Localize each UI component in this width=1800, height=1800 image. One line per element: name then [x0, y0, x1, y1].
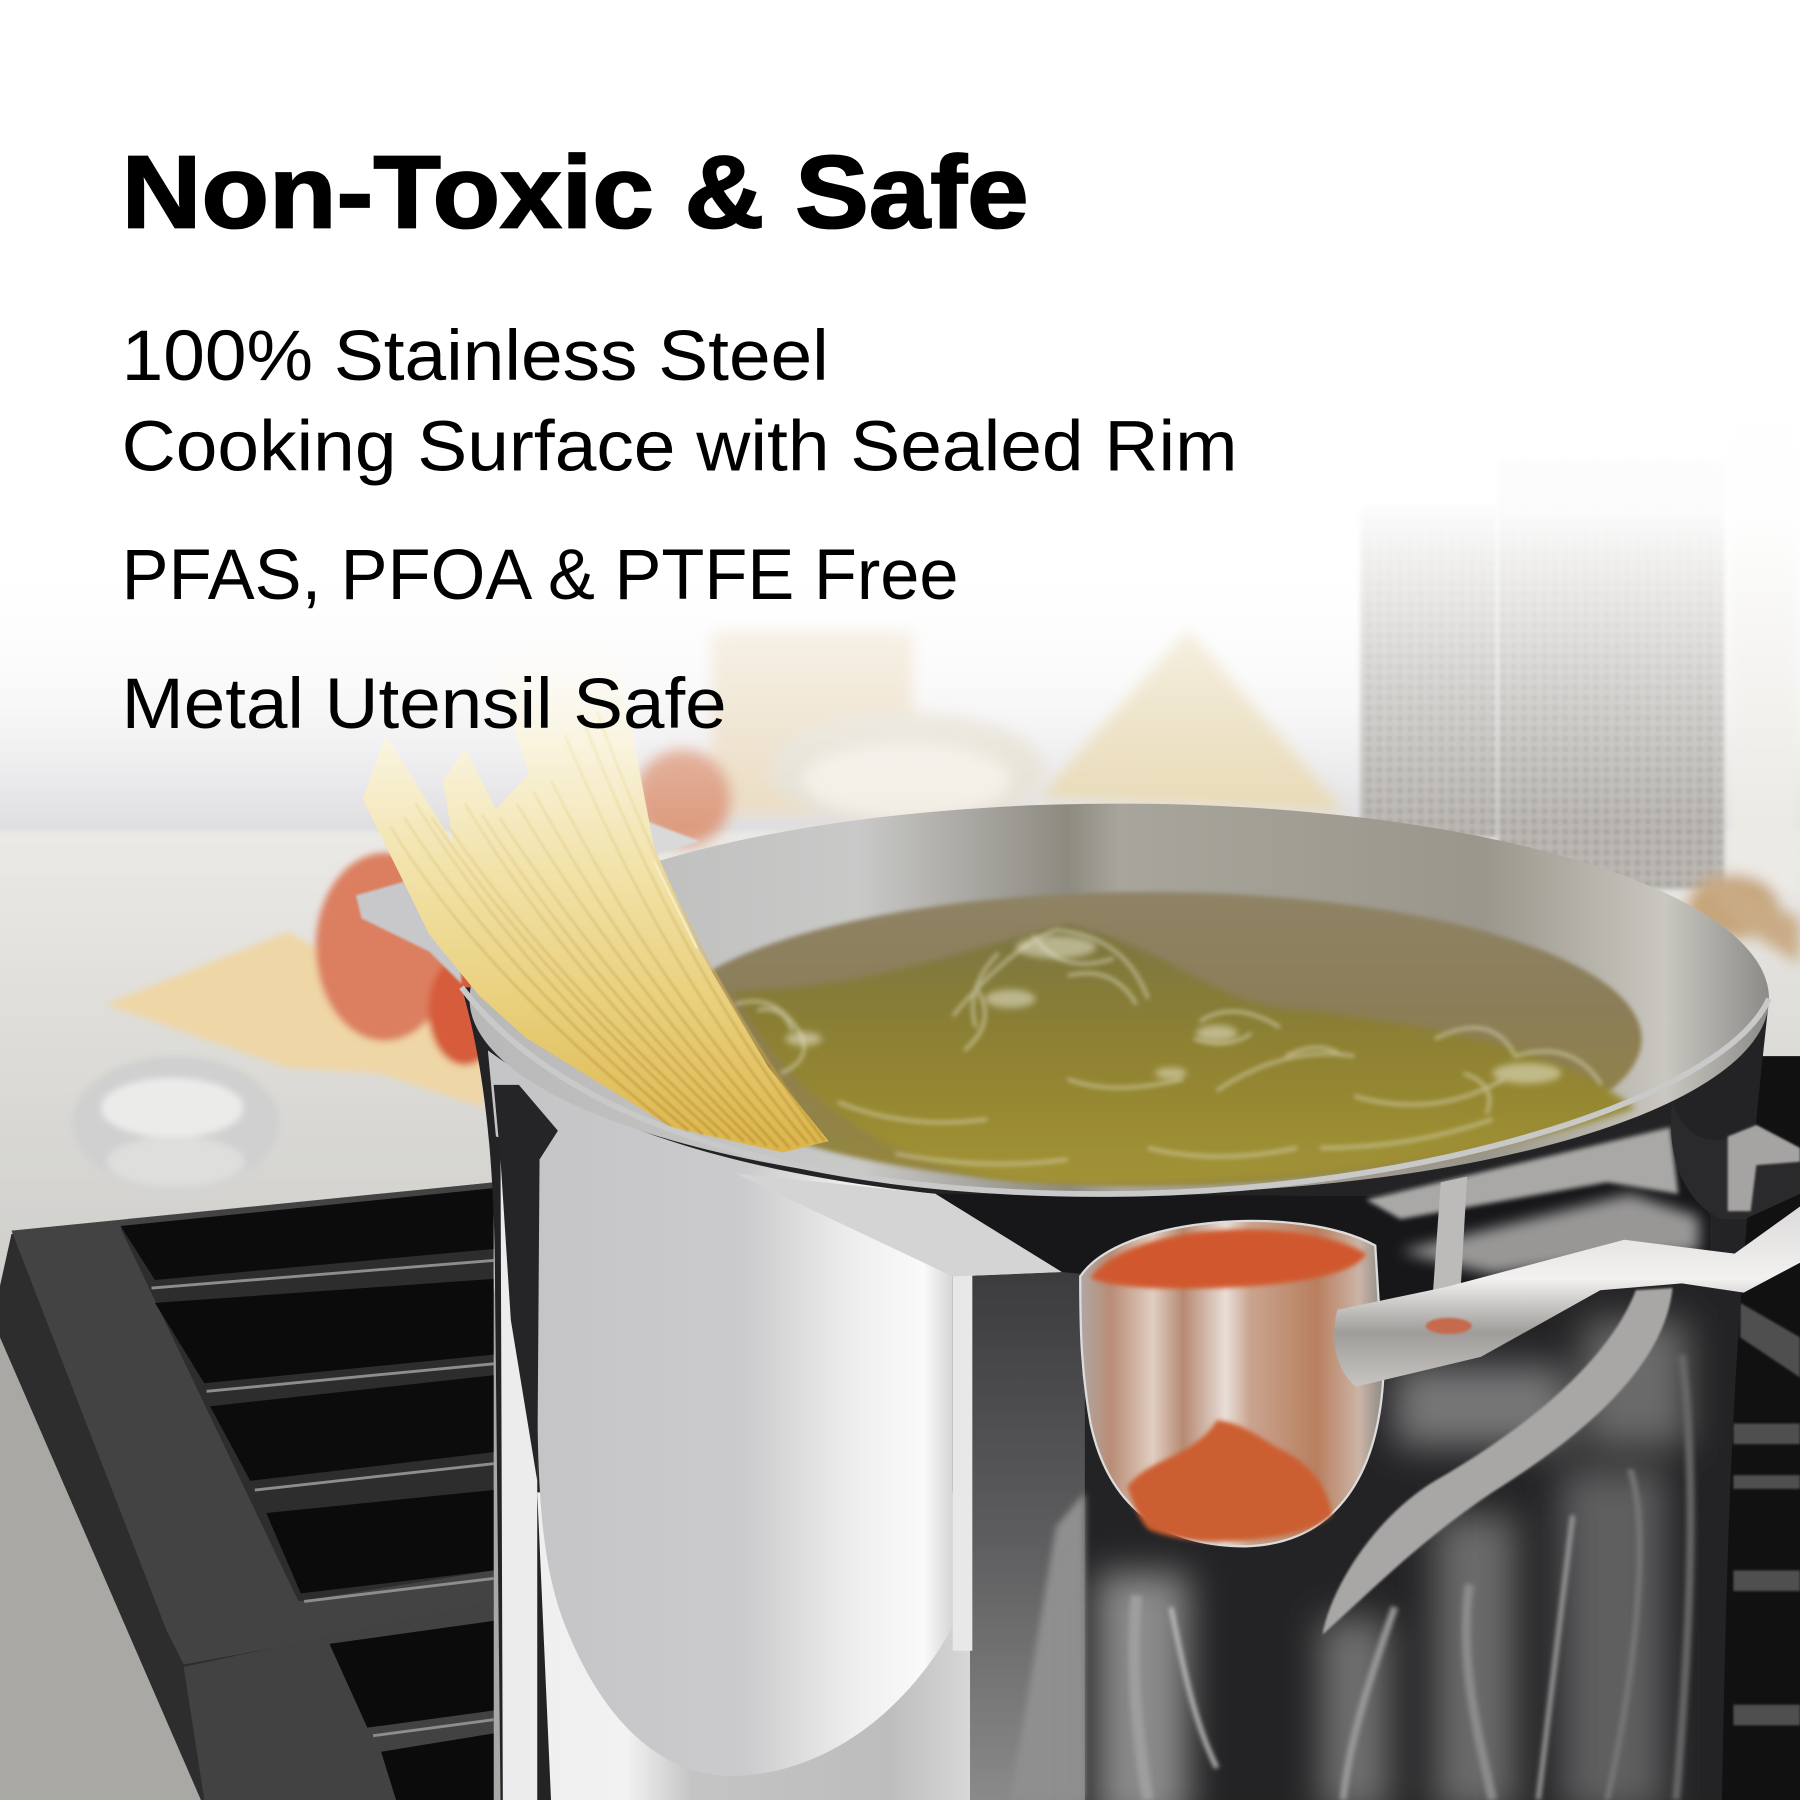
right side reflections [1134, 1355, 1691, 1800]
dark left reflection [494, 1085, 558, 1481]
line: Cooking Surface with Sealed Rim: Cooking Surface with Sealed Rim [122, 408, 1238, 487]
main grey reflection [488, 1050, 1062, 1776]
column light band [1010, 1492, 1085, 1800]
dark column right of reflection [970, 1272, 1085, 1800]
pour-spout well [1080, 1221, 1383, 1546]
boiling water [654, 892, 1642, 1186]
dark band beneath rim [936, 1131, 1710, 1320]
spaghetti bundle [363, 634, 829, 1153]
rim hardware band [1366, 1127, 1678, 1219]
line: PFAS, PFOA & PTFE Free: PFAS, PFOA & PTFE Free [122, 536, 959, 615]
lower reflection of tomato [1127, 1420, 1332, 1541]
line: Metal Utensil Safe: Metal Utensil Safe [122, 665, 727, 744]
pot body [461, 987, 1768, 1800]
main handle [1334, 1207, 1800, 1387]
far handle [643, 820, 700, 855]
text block [122, 133, 1237, 744]
left near handle [356, 882, 461, 984]
rim band reflection [735, 1173, 1062, 1277]
top reflection of tomato [1091, 1229, 1366, 1289]
right rim hardware [1671, 1102, 1800, 1219]
riveted strap [1433, 1177, 1467, 1297]
stove grates [0, 1056, 1800, 1800]
line: 100% Stainless Steel: 100% Stainless Steel [122, 317, 829, 396]
lower right grey reflections [1096, 1320, 1688, 1800]
left white edge strip [501, 1148, 537, 1800]
stockpot [356, 804, 1800, 1800]
tomatoes, napkin and salt bowl [72, 853, 502, 1189]
bright vertical strip [953, 1272, 972, 1651]
rim interior [470, 804, 1769, 1194]
title: Non-Toxic & Safe [122, 133, 1029, 249]
front rim line [461, 987, 1769, 1194]
lower handle strap [1322, 1288, 1673, 1635]
lower silver area [537, 1492, 973, 1800]
